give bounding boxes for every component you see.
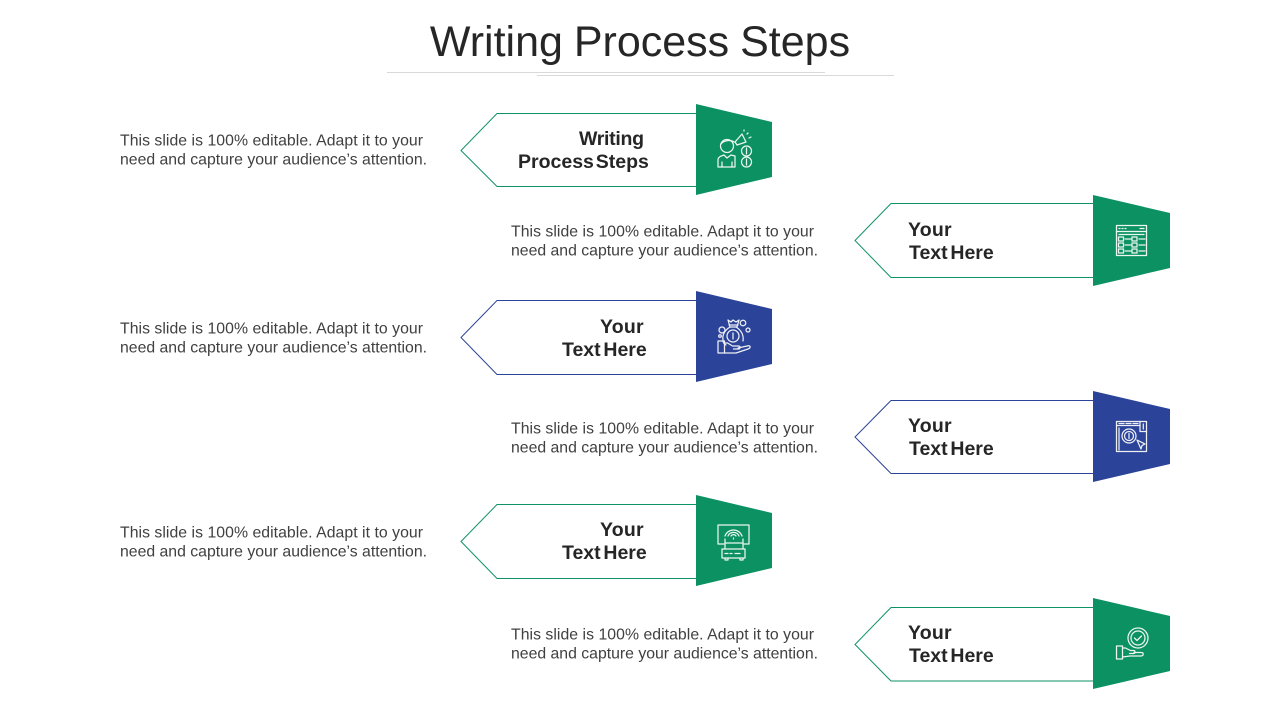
heading 2: Text Here xyxy=(909,242,994,264)
blue tab 3 xyxy=(696,291,772,382)
description 2 xyxy=(511,224,818,260)
arrow outline 2 xyxy=(855,204,1093,278)
heading 1: Process Steps xyxy=(518,151,649,173)
green tab 1 xyxy=(696,104,772,195)
description 2: need and capture your audience’s attention. xyxy=(511,242,818,260)
green tab 5 xyxy=(696,495,772,586)
heading 6 xyxy=(908,622,994,667)
heading 2 xyxy=(908,219,994,264)
heading 1 xyxy=(518,128,649,173)
description 3 xyxy=(120,320,427,356)
description 5 xyxy=(120,524,427,560)
green tab 6 xyxy=(1093,598,1170,689)
heading 5 xyxy=(562,519,647,564)
description 6: This slide is 100% editable. Adapt it to your xyxy=(511,626,814,644)
step 3 xyxy=(120,291,772,382)
description 5: This slide is 100% editable. Adapt it to your xyxy=(120,524,423,542)
description 3: This slide is 100% editable. Adapt it to your xyxy=(120,320,423,338)
step 1 xyxy=(120,104,772,195)
description 2: This slide is 100% editable. Adapt it to your xyxy=(511,224,814,240)
arrow outline 5 xyxy=(461,504,696,578)
heading 4: Your xyxy=(908,415,952,437)
arrow outline 6 xyxy=(855,608,1093,681)
description 6: need and capture your audience’s attention. xyxy=(511,646,818,662)
green tab 2 xyxy=(1093,195,1170,286)
description 1 xyxy=(120,132,427,168)
heading 5: Your xyxy=(600,519,644,541)
heading 3 xyxy=(562,316,647,361)
description 4: This slide is 100% editable. Adapt it to your xyxy=(511,420,814,438)
heading 2: Your xyxy=(908,219,952,241)
arrow outline 4 xyxy=(855,400,1093,474)
description 4: need and capture your audience’s attention. xyxy=(511,440,818,456)
description 6 xyxy=(511,626,818,662)
title: Writing Process Steps xyxy=(430,18,850,66)
heading 6: Text Here xyxy=(909,645,994,667)
arrow outline 3 xyxy=(461,300,696,374)
heading 5: Text Here xyxy=(562,542,647,564)
description 1: This slide is 100% editable. Adapt it to your xyxy=(120,132,423,150)
description 5: need and capture your audience’s attention. xyxy=(120,544,427,560)
heading 3: Your xyxy=(600,316,644,338)
heading 4 xyxy=(908,415,994,460)
heading 1: Writing xyxy=(579,128,644,150)
heading 4: Text Here xyxy=(909,438,994,460)
step 5 xyxy=(120,495,772,586)
arrow outline 1 xyxy=(461,114,696,186)
icon: browser table xyxy=(1116,226,1146,256)
heading 3: Text Here xyxy=(562,339,647,361)
description 1: need and capture your audience’s attention. xyxy=(120,152,427,168)
description 3: need and capture your audience’s attention. xyxy=(120,340,427,356)
description 4 xyxy=(511,420,818,456)
icon: hand with check badge xyxy=(1116,628,1148,659)
icon: router on screen xyxy=(718,525,749,560)
heading 6: Your xyxy=(908,622,952,644)
icon: money bag in hand xyxy=(718,320,750,353)
step 6 xyxy=(511,598,1170,689)
icon: person with megaphone and coins xyxy=(718,130,752,167)
step 2 xyxy=(511,195,1170,286)
icon: browser with dollar and cursor xyxy=(1116,422,1146,452)
step 4 xyxy=(511,391,1170,482)
blue tab 4 xyxy=(1093,391,1170,482)
